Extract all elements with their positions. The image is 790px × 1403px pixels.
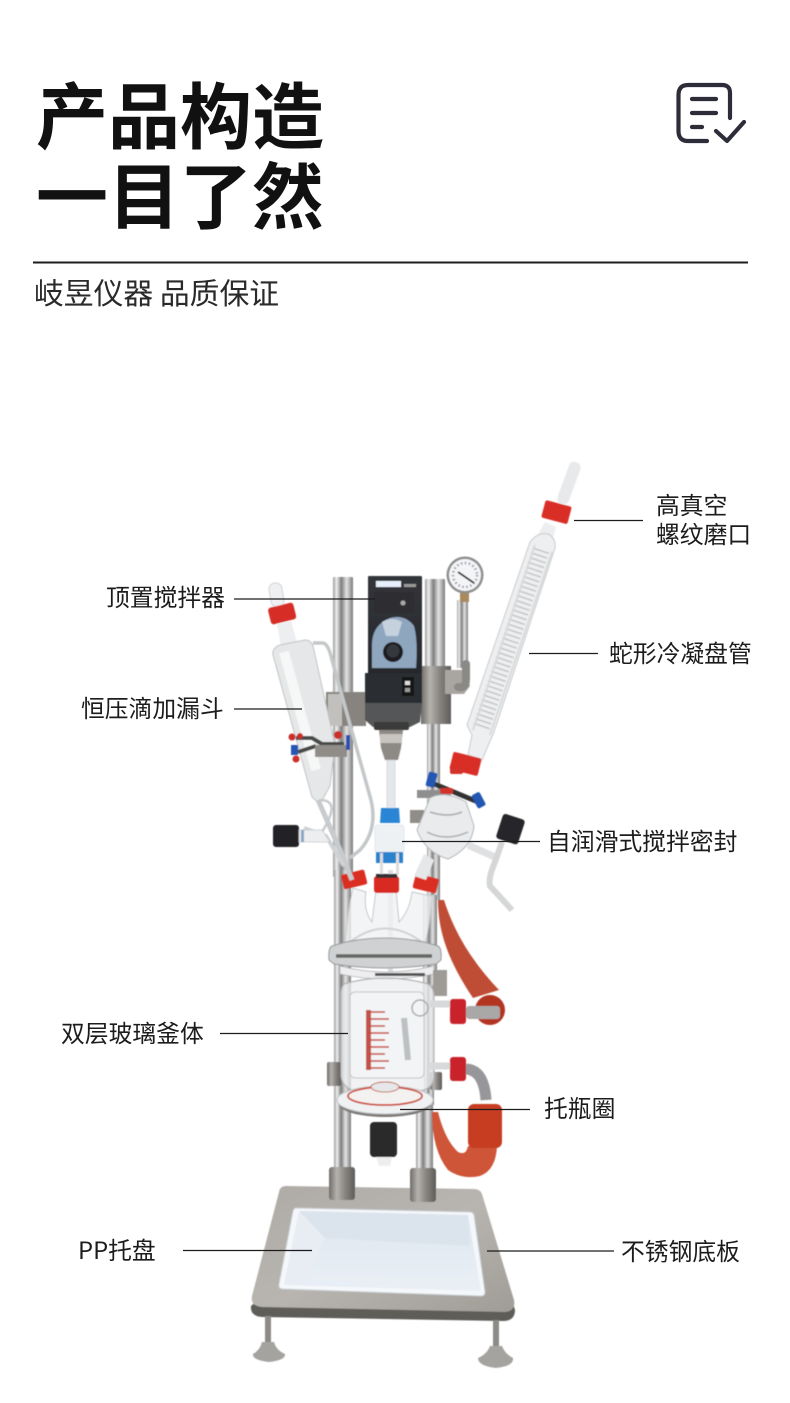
vessel outlets [430, 995, 505, 1100]
label: overhead stirrer: 顶置搅拌器 [106, 578, 225, 613]
title [36, 59, 324, 244]
spiral condenser [449, 460, 582, 776]
reactor lid glass necks [341, 869, 439, 944]
label: high vacuum thread [656, 486, 751, 550]
bottom drain valve [370, 1122, 397, 1166]
rod clamp block [326, 666, 470, 726]
label: double layer vessel: 双层玻璃釜体 [61, 1014, 204, 1049]
callout lines [183, 520, 643, 1251]
red hose sleeve [468, 1104, 502, 1148]
adapter glass bulb [414, 795, 525, 910]
product photo: glass reactor [251, 460, 582, 1368]
label: PP tray: PP托盘 [78, 1231, 156, 1266]
label: high vacuum thread: 螺纹磨口 [656, 515, 751, 550]
label: stirring seal: 自润滑式搅拌密封 [547, 822, 737, 857]
label: dropping funnel: 恒压滴加漏斗 [81, 689, 224, 724]
chuck and stirring shaft [379, 730, 403, 980]
clamp band and lid flange [329, 938, 447, 996]
constant pressure dropping funnel [267, 582, 373, 880]
PP tray [279, 1208, 485, 1296]
bottle support ring [337, 1082, 433, 1117]
heading divider [33, 262, 748, 264]
condenser clamp [410, 768, 486, 823]
subtitle: 岐昱仪器 品质保证 [34, 269, 279, 313]
icon: checklist document [678, 85, 744, 141]
label: spiral condenser: 蛇形冷凝盘管 [609, 634, 752, 669]
base plate [251, 1186, 515, 1321]
label: support ring: 托瓶圈 [544, 1089, 615, 1124]
label: high vacuum thread: 高真空 [656, 486, 727, 521]
double layer glass vessel [341, 978, 434, 1094]
stirring seal [375, 808, 404, 875]
funnel clamp [288, 731, 350, 762]
red hose upper [438, 900, 499, 998]
title: 产品构造 [36, 59, 324, 164]
support rods [327, 577, 445, 1202]
title: 一目了然 [36, 139, 324, 244]
pressure gauge [446, 556, 484, 687]
label: stainless steel base: 不锈钢底板 [621, 1232, 740, 1267]
red hose lower [432, 1112, 497, 1177]
feet [253, 1316, 513, 1368]
overhead stirrer [365, 576, 422, 730]
left valve [273, 825, 330, 847]
